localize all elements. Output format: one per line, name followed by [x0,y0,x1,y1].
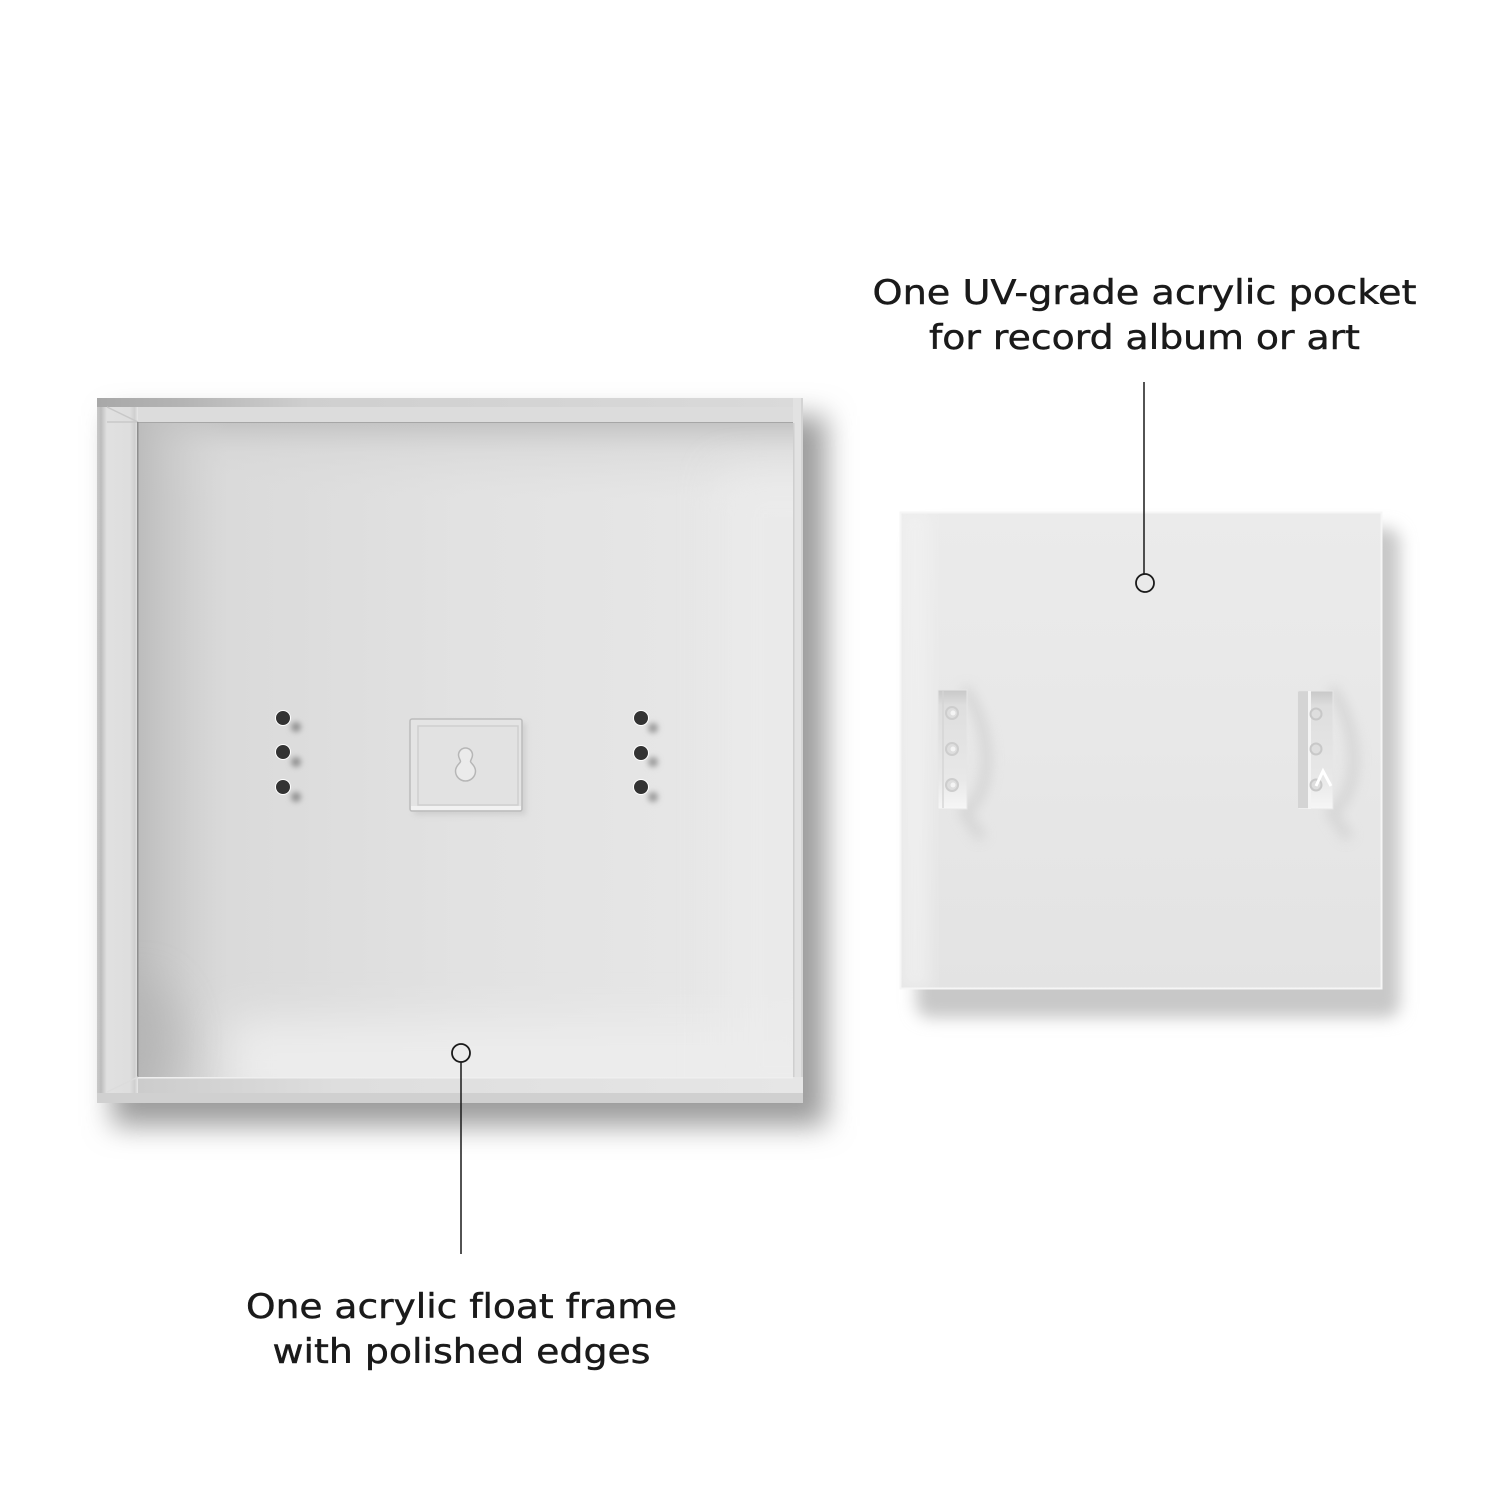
mounting holes left [276,710,301,802]
left peg [938,690,967,809]
callout text: for record album or art [929,318,1360,357]
frame bottom wall [97,1077,803,1103]
callout text: One UV-grade acrylic pocket [872,273,1416,312]
panel: acrylic pocket [900,512,1400,1018]
pocket sheet [900,512,1382,989]
right peg shadow [1331,688,1354,838]
marker circle [1136,574,1154,592]
callout: float frame [246,1044,677,1371]
keyhole bracket [410,719,526,815]
corner bevels [107,407,138,422]
callout text [246,1287,677,1371]
panel: acrylic float frame [97,398,840,1126]
frame left wall [97,407,138,1103]
pocket drop shadow [916,528,1400,1018]
frame right wall [793,398,803,1103]
pocket edge [900,512,1382,988]
inner left edge line [137,422,138,1077]
frame top wall [97,398,803,424]
pocket soft highlights [906,573,1360,982]
callout: pocket [872,273,1416,592]
frame drop shadow [112,416,826,1126]
callout text: with polished edges [272,1332,650,1371]
right peg [1298,691,1333,809]
frame inner floor [138,423,793,1077]
left peg shadow [964,688,986,838]
icon: keyhole [456,748,476,781]
leader line [460,1062,462,1254]
callout text: One acrylic float frame [246,1287,677,1326]
mounting holes right [634,710,658,802]
marker circle [452,1044,470,1062]
callout text [872,273,1416,357]
frame body [97,398,803,1103]
leader line [1143,382,1145,574]
